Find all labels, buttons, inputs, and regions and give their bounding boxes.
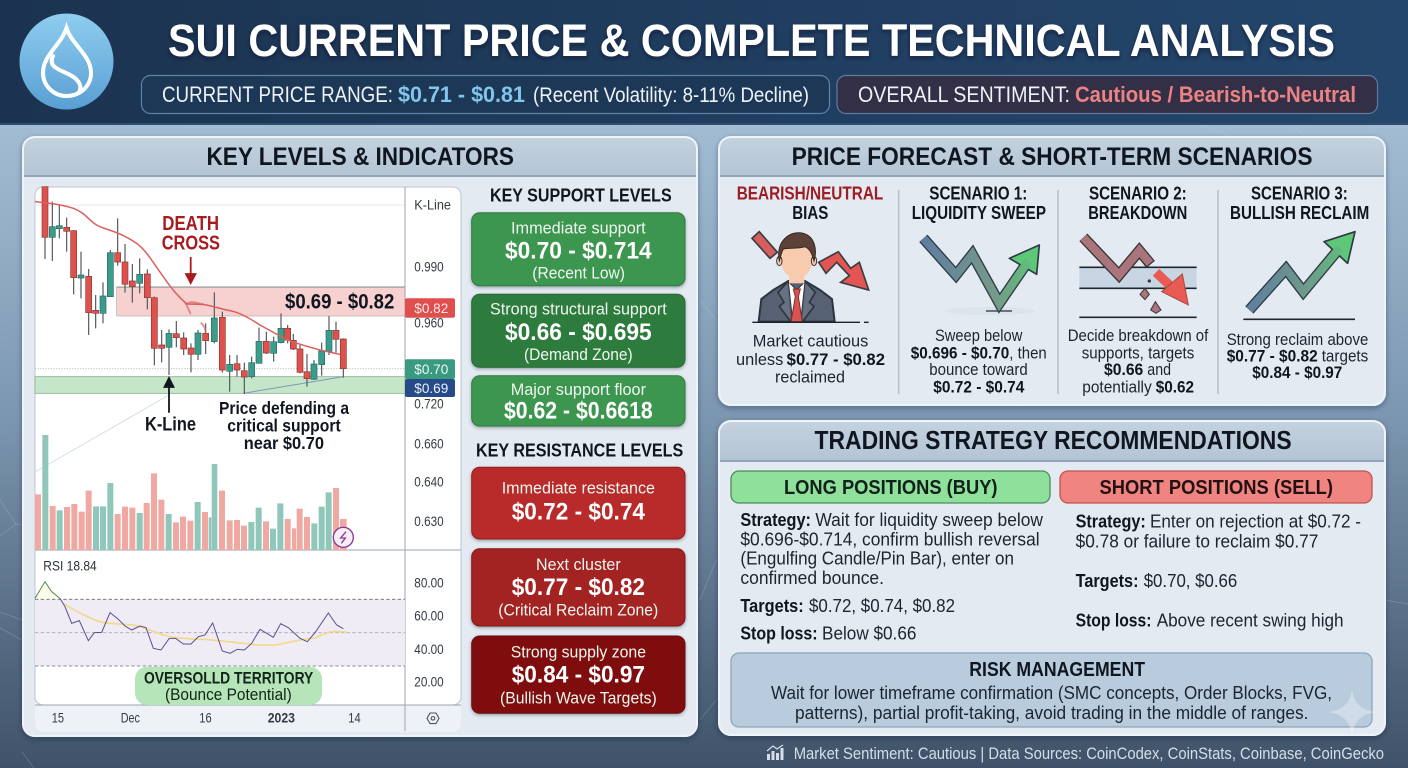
axis divider [35, 187, 461, 731]
label: price defending support: near $0.70 [244, 433, 324, 453]
short positions header [1060, 471, 1372, 503]
arrow: k-line [164, 378, 174, 413]
card: next cluster: Next cluster [536, 556, 621, 574]
time axis labels: Dec [121, 711, 140, 726]
card: strong supply zone: (Bullish Wave Targets) [500, 689, 657, 707]
price axis labels: 0.640 [414, 475, 444, 490]
label: price defending support: critical support [227, 415, 341, 435]
arrow: death cross [186, 257, 195, 283]
price axis labels: 0.660 [414, 436, 444, 451]
price axis labels: 0.720 [414, 396, 444, 411]
icon: settings [427, 713, 439, 724]
text block: short strategy: $0.78 or failure to reclaim $0.77 [1076, 531, 1318, 552]
text block: long strategy: Strategy: [740, 509, 811, 530]
icon: lightning badge [333, 527, 353, 547]
label: resistance range: $0.69 - $0.82 [285, 290, 394, 313]
text block: short strategy: Targets: [1076, 570, 1138, 591]
candlesticks [42, 187, 346, 394]
label: death cross [162, 213, 220, 254]
heading: price forecast: PRICE FORECAST & SHORT-TERM SCENARIOS [792, 143, 1312, 171]
price tag: 0.69: $0.69 [414, 380, 448, 396]
icon: breakdown arrow [1079, 237, 1197, 317]
price axis labels: 0.630 [414, 514, 444, 529]
current price range pill: $0.71 - $0.81 [398, 82, 525, 107]
column: scenario 1 liquidity sweep: $0.696 - $0.70 [911, 344, 1009, 362]
card: immediate support: $0.70 - $0.714 [505, 237, 652, 264]
panel: key levels and indicators [23, 137, 697, 736]
callout: risk management [731, 653, 1372, 727]
card: immediate resistance [472, 467, 685, 539]
column: bearish neutral bias: unless [736, 351, 783, 369]
card: strong structural support: $0.66 - $0.695 [505, 319, 652, 346]
card: next cluster: $0.77 - $0.82 [512, 574, 645, 601]
price tag: 0.82: $0.82 [414, 300, 448, 316]
column: scenario 3 bullish reclaim: $0.77 - $0.82 [1227, 348, 1318, 366]
column: scenario 2 breakdown: $0.62 [1156, 378, 1194, 396]
text block: long strategy: Wait for liquidity sweep below [815, 509, 1044, 530]
column: scenario 2 breakdown: SCENARIO 2: [1089, 183, 1187, 203]
callout: oversold territory [135, 667, 322, 705]
price tag: 0.69 [405, 379, 455, 397]
heading: key levels: KEY LEVELS & INDICATORS [206, 143, 514, 171]
trend line [35, 395, 169, 472]
time axis labels: 14 [348, 711, 361, 726]
icon: liquidity sweep arrow [923, 238, 1039, 315]
resistance zone [117, 287, 405, 316]
icon: bullish reclaim arrow [1243, 232, 1355, 319]
column: scenario 2 breakdown [1068, 183, 1209, 396]
price tag: 0.70 [405, 359, 455, 379]
text block: long strategy: confirmed bounce. [740, 567, 884, 588]
column: bearish neutral bias: reclaimed [775, 369, 845, 387]
long positions header: LONG POSITIONS (BUY) [784, 476, 998, 499]
overall sentiment pill [837, 76, 1378, 114]
price axis labels: 20.00 [414, 675, 444, 690]
callout: oversold territory: (Bounce Potential) [165, 686, 292, 704]
callout: risk management: RISK MANAGEMENT [969, 659, 1145, 681]
column: scenario 1 liquidity sweep: $0.72 - $0.74 [933, 378, 1025, 396]
column: scenario 3 bullish reclaim: Strong reclaim above [1227, 331, 1368, 349]
label: k-line: K-Line [145, 415, 196, 436]
column: scenario 2 breakdown: BREAKDOWN [1088, 203, 1187, 223]
heading: trading strategy: TRADING STRATEGY RECOMMENDATIONS [814, 427, 1292, 455]
card: strong structural support: Strong structural support [490, 300, 667, 318]
card: immediate support [472, 213, 685, 286]
card: strong supply zone [472, 636, 685, 713]
callout: oversold territory: OVERSOLLD TERRITORY [144, 669, 313, 687]
time axis labels: 16 [199, 711, 212, 726]
panel: trading strategy recommendations [719, 421, 1385, 736]
current price range pill: (Recent Volatility: 8-11% Decline) [533, 84, 809, 107]
column: bearish neutral bias [736, 183, 885, 387]
card: next cluster: (Critical Reclaim Zone) [498, 602, 658, 620]
column: scenario 1 liquidity sweep: SCENARIO 1: [929, 183, 1027, 203]
column: scenario 1 liquidity sweep: , then [1009, 344, 1047, 362]
column: bearish neutral bias: BEARISH/NEUTRAL [737, 183, 883, 203]
heading: key resistance levels: KEY RESISTANCE LEVELS [476, 441, 683, 461]
price tag: 0.70: $0.70 [414, 361, 448, 377]
column: scenario 3 bullish reclaim: $0.84 - $0.97 [1252, 364, 1342, 382]
card: major support floor [472, 376, 685, 426]
label: price defending support: Price defending a [219, 398, 349, 418]
price axis labels [414, 197, 451, 690]
price axis labels: 60.00 [414, 609, 444, 624]
column: bearish neutral bias: $0.77 - $0.82 [787, 351, 885, 369]
heading: key support levels: KEY SUPPORT LEVELS [490, 186, 672, 206]
card: immediate support: (Recent Low) [532, 264, 625, 282]
column: bearish neutral bias: BIAS [792, 203, 828, 223]
volume bars [35, 435, 353, 550]
RSI chart [35, 582, 405, 666]
price axis labels: 0.990 [414, 260, 444, 275]
text block: long strategy: $0.72, $0.74, $0.82 [809, 595, 955, 616]
price axis labels: 0.960 [414, 316, 444, 331]
overall sentiment pill: Cautious / Bearish-to-Neutral [1075, 82, 1356, 107]
label: death cross: DEATH [162, 213, 219, 235]
price axis labels: K-Line [414, 197, 451, 212]
card: immediate resistance: Immediate resistance [502, 479, 655, 497]
column: scenario 1 liquidity sweep: bounce toward [929, 361, 1028, 379]
header band [0, 0, 1408, 125]
column: scenario 3 bullish reclaim: targets [1322, 348, 1368, 366]
label: price defending support [219, 398, 349, 453]
card: next cluster [472, 549, 685, 626]
column: scenario 2 breakdown: supports, targets [1082, 344, 1194, 362]
text block: long strategy: Stop loss: [740, 622, 818, 643]
price axis labels: 80.00 [414, 575, 444, 590]
text block: long strategy: Targets: [740, 595, 804, 616]
current price range pill: CURRENT PRICE RANGE: [162, 82, 393, 107]
text block: long strategy: (Engulfing Candle/Pin Bar), enter on [740, 548, 1014, 569]
label: death cross: CROSS [162, 232, 220, 254]
text block: short strategy: Stop loss: [1076, 610, 1152, 631]
current price range pill [142, 76, 830, 114]
callout: risk management: patterns), partial profit-taking, avoid trading in the middle of ranges. [795, 702, 1308, 723]
price axis labels: 40.00 [414, 642, 444, 657]
card: strong supply zone: $0.84 - $0.97 [512, 662, 645, 689]
callout: risk management: Wait for lower timeframe confirmation (SMC concepts, Order Blocks, FVG, [771, 682, 1332, 703]
text block: short strategy: Enter on rejection at $0.72 - [1150, 511, 1361, 532]
panel: price forecast and scenarios [719, 137, 1385, 405]
column: scenario 3 bullish reclaim: BULLISH RECLAIM [1230, 203, 1369, 223]
title: SUI CURRENT PRICE & COMPLETE TECHNICAL ANALYSIS [168, 15, 1335, 66]
text block: short strategy: Strategy: [1076, 511, 1146, 532]
time axis labels: 15 [52, 711, 64, 726]
column: bearish neutral bias: Market cautious [753, 333, 868, 351]
column: scenario 2 breakdown: and [1147, 361, 1171, 379]
column: scenario 3 bullish reclaim: SCENARIO 3: [1251, 183, 1348, 203]
text block: short strategy: $0.70, $0.66 [1144, 570, 1237, 591]
price tag: 0.82 [405, 298, 455, 318]
moving average line [35, 202, 340, 354]
time axis labels: 2023 [268, 711, 295, 726]
card: major support floor: Major support floor [511, 381, 646, 399]
text block: long strategy: Below $0.66 [822, 622, 916, 643]
card: immediate support: Immediate support [511, 219, 646, 237]
icon: SUI logo [20, 14, 114, 110]
time axis labels [52, 711, 361, 726]
long positions header [731, 471, 1050, 503]
text block: short strategy [1076, 511, 1361, 631]
card: strong supply zone: Strong supply zone [511, 643, 646, 661]
column: scenario 2 breakdown: Decide breakdown of [1068, 327, 1209, 345]
text block: short strategy: Above recent swing high [1157, 610, 1344, 631]
text block: long strategy [740, 509, 1044, 643]
RSI label: RSI 18.84 [43, 559, 97, 574]
icon: sparkle [1328, 689, 1376, 736]
column: scenario 2 breakdown: $0.66 [1104, 361, 1143, 379]
overall sentiment pill: OVERALL SENTIMENT: [858, 82, 1070, 107]
support zone [35, 377, 405, 393]
card: strong structural support [472, 294, 685, 367]
column: scenario 1 liquidity sweep: Sweep below [935, 327, 1022, 345]
text block: long strategy: $0.696-$0.714, confirm bullish reversal [740, 528, 1040, 549]
column: scenario 3 bullish reclaim [1227, 183, 1369, 382]
column: scenario 1 liquidity sweep: LIQUIDITY SWEEP [912, 203, 1046, 223]
card: major support floor: $0.62 - $0.6618 [504, 397, 653, 424]
card: immediate resistance: $0.72 - $0.74 [512, 498, 645, 525]
chart: candlestick with indicators [35, 187, 461, 732]
column: scenario 1 liquidity sweep [911, 183, 1047, 396]
short positions header: SHORT POSITIONS (SELL) [1100, 476, 1333, 499]
icon: businessman with falling arrow [752, 232, 869, 322]
column: scenario 2 breakdown: potentially [1082, 378, 1152, 396]
icon: market chart [767, 745, 784, 760]
card: strong structural support: (Demand Zone) [524, 346, 633, 364]
